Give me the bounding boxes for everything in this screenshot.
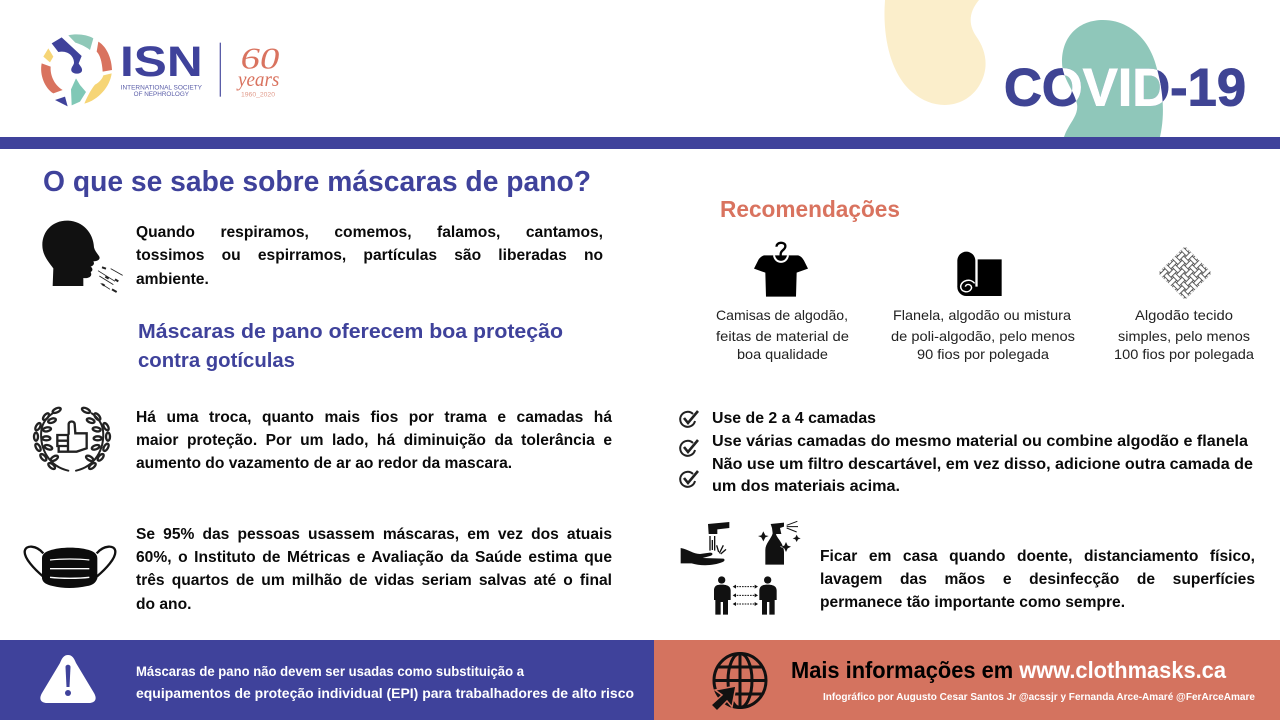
text: particles released: tossimos ou espirramos, partículas são liberadas no xyxy=(136,247,603,264)
text: plain woven cotton: Algodão tecido xyxy=(1135,307,1233,323)
header: ISN logo xyxy=(41,34,279,106)
text: warning xyxy=(136,664,634,701)
text: flannel xyxy=(891,307,1075,362)
text: cotton shirts: feitas de material de xyxy=(716,328,849,344)
text: layers checklist: um dos materiais acima. xyxy=(712,478,900,495)
text: flannel: Flanela, algodão ou mistura xyxy=(893,307,1071,323)
heading: recommendations: Recomendações xyxy=(720,196,900,222)
heading: cloth mask protection xyxy=(138,321,563,372)
text: flannel: 90 fios por polegada xyxy=(917,346,1049,362)
text: warning: Máscaras de pano não devem ser usadas como substituição a xyxy=(136,664,524,679)
text: stay home: Ficar em casa quando doente, distanciamento físico, xyxy=(820,548,1255,565)
icon: fabric roll xyxy=(957,252,1002,296)
text: flannel: de poli-algodão, pelo menos xyxy=(891,328,1075,344)
text: trade-off xyxy=(136,409,612,472)
icon: laurel with thumbs up xyxy=(32,406,112,472)
header: COVID-19 title with blobs: COVID-19 xyxy=(1004,58,1246,118)
text: cotton shirts: Camisas de algodão, xyxy=(716,307,848,323)
header: COVID-19 title with blobs: COVID-19 xyxy=(1004,58,1246,118)
header: ISN logo: OF NEPHROLOGY xyxy=(134,91,190,98)
text: trade-off: maior proteção. Por um lado, há diminuição da tolerância e xyxy=(136,432,612,449)
text: trade-off: Há uma troca, quanto mais fios por trama e camadas há xyxy=(136,409,612,426)
text: cotton shirts xyxy=(716,307,849,362)
text: layers checklist xyxy=(712,410,1253,495)
text: credits: Infográfico por Augusto Cesar Santos Jr @acssjr y Fernanda Arce-Amaré @FerArceAmare xyxy=(823,691,1255,703)
icon: face mask xyxy=(24,546,116,588)
icon: globe with cursor xyxy=(712,652,768,710)
icon: t-shirt on hanger xyxy=(754,242,808,297)
header: ISN logo: 1960_2020 xyxy=(241,92,276,98)
text: layers checklist: Use de 2 a 4 camadas xyxy=(712,410,876,427)
heading: cloth mask protection: Máscaras de pano oferecem boa proteção xyxy=(138,321,563,343)
text: plain woven cotton: 100 fios por polegada xyxy=(1114,346,1254,362)
text: layers checklist: Use várias camadas do mesmo material ou combine algodão e flanela xyxy=(712,433,1248,450)
header band xyxy=(0,137,1280,149)
icon: hand washing, disinfectant spray, distancing xyxy=(680,520,800,615)
heading: cloth mask protection: contra gotículas xyxy=(138,350,295,372)
text: layers checklist: Não use um filtro descartável, em vez disso, adicione outra camada de xyxy=(712,456,1253,473)
footer: more information panel xyxy=(654,640,1280,720)
icon: check marks xyxy=(679,410,699,488)
header: ISN logo: INTERNATIONAL SOCIETY xyxy=(121,84,203,91)
text: plain woven cotton: simples, pelo menos xyxy=(1118,328,1250,344)
icon: warning triangle xyxy=(40,655,96,703)
text: 95 percent mask usage: 60%, o Instituto de Métricas e Avaliação da Saúde estima que xyxy=(136,549,612,566)
text: 95 percent mask usage: Se 95% das pessoas usassem máscaras, em vez dos atuais xyxy=(136,526,612,543)
text: more information: Mais informações em www.clothmasks.ca xyxy=(791,657,1226,683)
text: plain woven cotton xyxy=(1114,307,1254,362)
text: 95 percent mask usage: do ano. xyxy=(136,596,191,613)
text: particles released xyxy=(136,224,603,288)
text: 95 percent mask usage xyxy=(136,526,612,613)
header: ISN logo: ISN xyxy=(120,38,203,86)
footer: warning panel xyxy=(0,640,654,720)
icon: head breathing out particles xyxy=(42,220,123,293)
text: stay home xyxy=(820,548,1255,611)
text: particles released: ambiente. xyxy=(136,271,209,288)
text: particles released: Quando respiramos, comemos, falamos, cantamos, xyxy=(136,224,603,241)
header: ISN logo: 60 xyxy=(241,42,279,76)
text: cotton shirts: boa qualidade xyxy=(737,346,828,362)
header: COVID-19 title with blobs xyxy=(884,0,1246,137)
icon: woven cotton xyxy=(1159,247,1211,299)
text: warning: equipamentos de proteção individual (EPI) para trabalhadores de alto risco xyxy=(136,686,634,701)
text: trade-off: aumento do vazamento de ar ao redor da mascara. xyxy=(136,455,512,472)
text: 95 percent mask usage: três quartos de um milhão de vidas seriam salvas até o final xyxy=(136,572,612,589)
main title: O que se sabe sobre máscaras de pano? xyxy=(43,166,591,198)
text: stay home: permanece tão importante como sempre. xyxy=(820,594,1125,611)
text: stay home: lavagem das mãos e desinfecção de superfícies xyxy=(820,571,1255,588)
header: ISN logo: years xyxy=(236,69,279,91)
